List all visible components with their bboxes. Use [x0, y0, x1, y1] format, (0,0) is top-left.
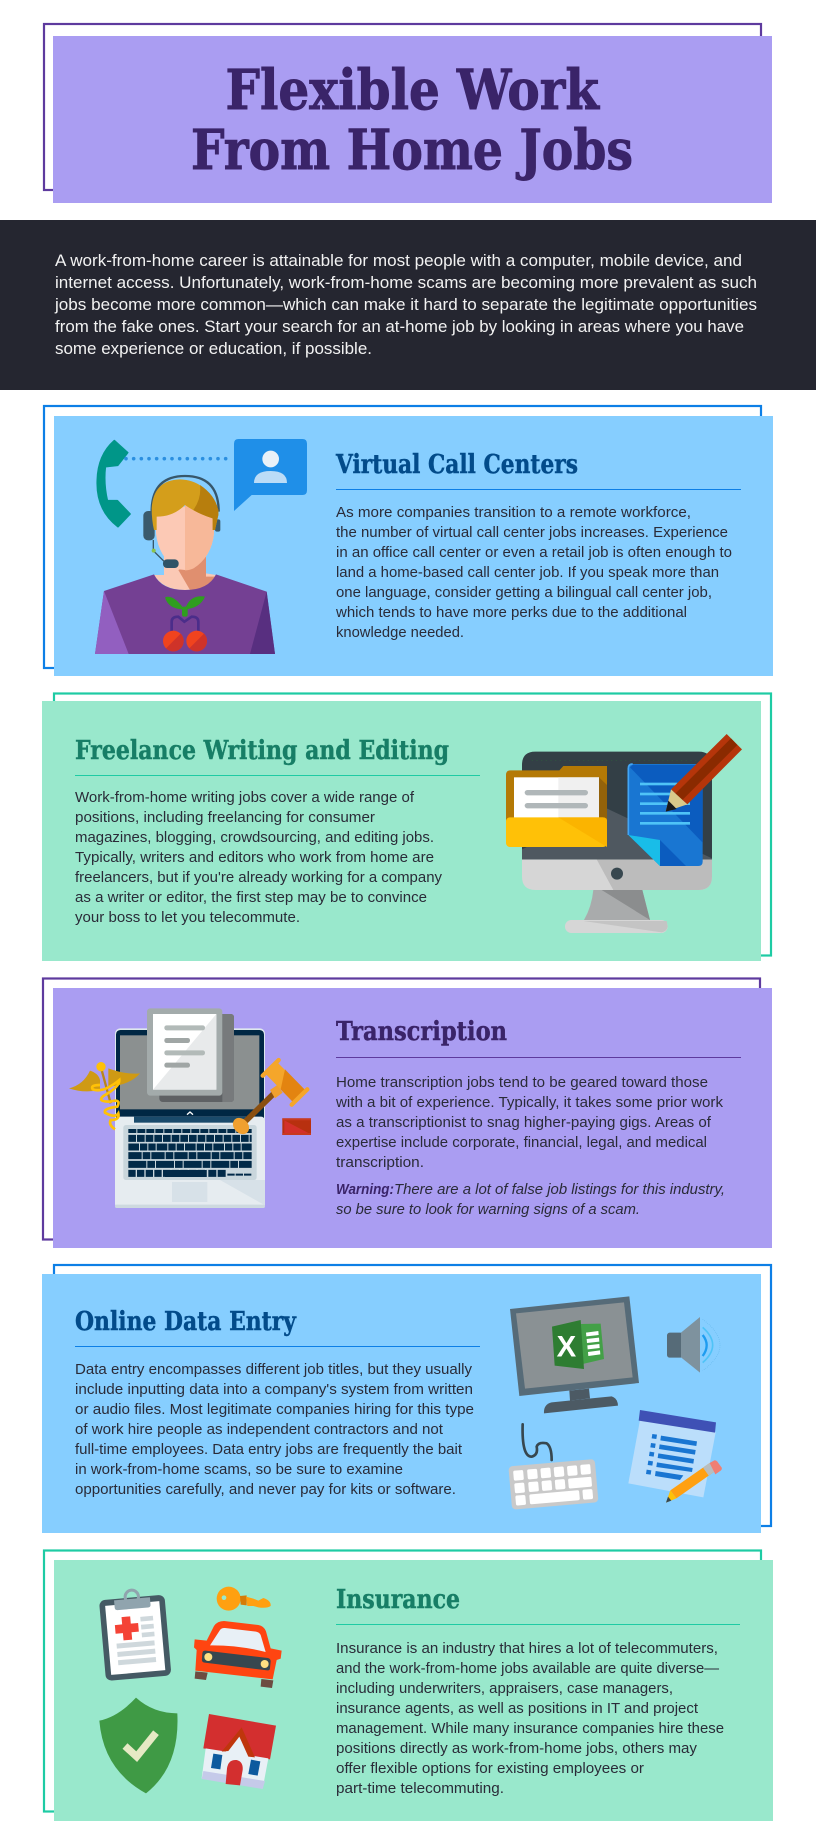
heading: Transcription: [336, 1017, 507, 1047]
body text: in work-from-home scams, so be sure to examine: [75, 1461, 403, 1478]
panel: virtual call centers: [44, 406, 773, 676]
heading: Virtual Call Centers: [335, 450, 578, 480]
intro text: jobs become more common—which can make it hard to separate the legitimate opportunities: [54, 296, 757, 314]
warning note: [336, 1181, 725, 1218]
panel: online data entry: [42, 1265, 771, 1533]
intro text: internet access. Unfortunately, work-from-home scams are becoming more prevalent as such: [55, 274, 757, 292]
body text: As more companies transition to a remote workforce,: [336, 504, 691, 521]
body text: expertise include corporate, financial, legal, and medical: [336, 1134, 707, 1151]
panel: insurance: [44, 1550, 773, 1821]
body text: [336, 1640, 724, 1797]
panel: transcription: [43, 978, 772, 1248]
body text: freelancers, but if you're already working for a company: [75, 869, 442, 886]
body text: [335, 1074, 723, 1171]
body text: the number of virtual call center jobs increases. Experience: [336, 524, 728, 541]
panel: title: [44, 24, 772, 203]
icon: call center agent: [95, 439, 307, 654]
body text: positions, including freelancing for consumer: [75, 809, 375, 826]
title: Flexible Work: [226, 57, 601, 122]
body text: [335, 504, 732, 641]
warning note: so be sure to look for warning signs of a scam.: [336, 1201, 640, 1218]
icon: insurance items: [98, 1587, 282, 1793]
body text: one language, consider getting a bilingual call center job,: [336, 584, 712, 601]
body text: full-time employees. Data entry jobs are frequently the bait: [75, 1441, 463, 1458]
heading: Online Data Entry: [75, 1307, 297, 1337]
intro text: from the fake ones. Start your search for an at-home job by looking in areas where you have: [55, 318, 744, 336]
body text: positions directly as work-from-home jobs, others may: [336, 1740, 697, 1757]
panel: freelance writing and editing: [42, 694, 771, 961]
body text: opportunities carefully, and never pay for kits or software.: [75, 1481, 456, 1498]
warning note: There are a lot of false job listings for this industry,: [394, 1181, 725, 1198]
body text: as a writer or editor, the first step may be to convince: [75, 889, 427, 906]
title: From Home Jobs: [191, 117, 633, 182]
body text: management. While many insurance companies hire these: [336, 1720, 724, 1737]
intro text: A work-from-home career is attainable for most people with a computer, mobile device, and: [55, 252, 742, 270]
body text: your boss to let you telecommute.: [75, 909, 300, 926]
body text: land a home-based call center job. If you speak more than: [336, 564, 719, 581]
body text: include inputting data into a company's system from written: [75, 1381, 473, 1398]
intro text: [54, 252, 757, 358]
body text: which tends to have more perks due to the additional: [335, 604, 687, 621]
body text: or audio files. Most legitimate companies hiring for this type: [75, 1401, 474, 1418]
heading: Insurance: [336, 1585, 460, 1615]
body text: as a transcriptionist to snag higher-paying gigs. Areas of: [336, 1114, 712, 1131]
body text: Work-from-home writing jobs cover a wide range of: [75, 789, 415, 806]
icon: computer with folder and document: [506, 734, 742, 933]
icon: data entry devices: X: [557, 1330, 577, 1363]
body text: part-time telecommuting.: [336, 1780, 504, 1797]
panel: introduction: [0, 220, 816, 390]
icon: data entry devices: [508, 1296, 722, 1510]
body text: magazines, blogging, crowdsourcing, and editing jobs.: [75, 829, 434, 846]
body text: [75, 1361, 474, 1498]
body text: Data entry encompasses different job titles, but they usually: [75, 1361, 472, 1378]
heading: Freelance Writing and Editing: [75, 736, 449, 766]
body text: [75, 789, 442, 926]
body text: including underwriters, appraisers, case managers,: [336, 1680, 673, 1697]
body text: and the work-from-home jobs available are quite diverse—: [336, 1660, 719, 1677]
icon: laptop, documents, caduceus and gavel: [69, 1008, 311, 1208]
body text: in an office call center or even a retail job is often enough to: [336, 544, 732, 561]
warning note: Warning:: [336, 1181, 394, 1198]
body text: offer flexible options for existing employees or: [336, 1760, 644, 1777]
body text: Home transcription jobs tend to be geared toward those: [336, 1074, 708, 1091]
body text: Insurance is an industry that hires a lot of telecommuters,: [336, 1640, 718, 1657]
body text: transcription.: [336, 1154, 424, 1171]
title: [191, 57, 633, 182]
intro text: some experience or education, if possible.: [55, 340, 372, 358]
body text: insurance agents, as well as positions in IT and project: [336, 1700, 699, 1717]
body text: knowledge needed.: [336, 624, 464, 641]
body text: Typically, writers and editors who work from home are: [75, 849, 434, 866]
body text: with a bit of experience. Typically, it takes some prior work: [335, 1094, 723, 1111]
body text: of work hire people as independent contractors and not: [75, 1421, 444, 1438]
